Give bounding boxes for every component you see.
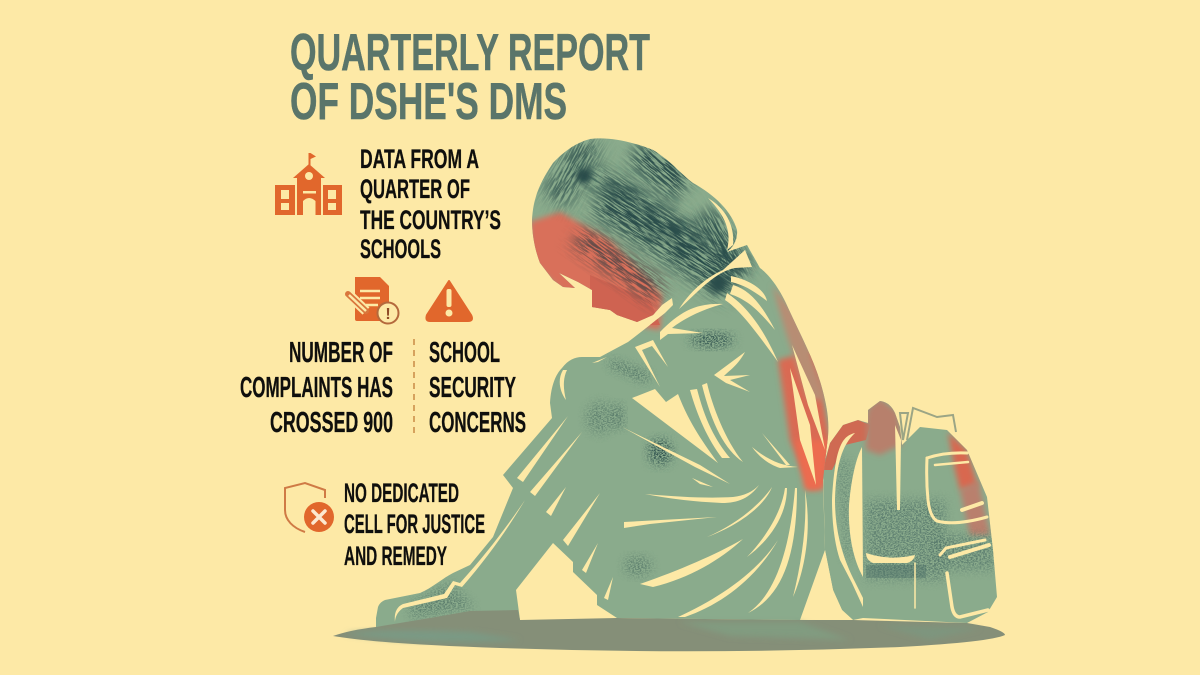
- text block: data coverage: SCHOOLS: [360, 234, 441, 264]
- text block: security concerns: [429, 337, 526, 439]
- leg cuts: [517, 416, 568, 482]
- backpack cuts: [800, 425, 915, 620]
- icon: warning triangle: [426, 281, 472, 321]
- text block: complaints: COMPLAINTS HAS: [240, 372, 393, 404]
- text block: complaints: NUMBER OF: [289, 337, 393, 369]
- text block: data coverage: [360, 144, 501, 264]
- text block: security concerns: SCHOOL: [429, 337, 500, 369]
- title: OF DSHE'S DMS: [290, 73, 567, 131]
- title: [290, 24, 650, 131]
- collar and neck: [679, 250, 752, 309]
- backpack papers: [900, 408, 956, 440]
- ground shadow: [333, 610, 1005, 651]
- red hair and face shading: [530, 212, 668, 330]
- text block: complaints: CROSSED 900: [270, 407, 393, 439]
- title: QUARTERLY REPORT: [290, 24, 650, 82]
- dark grunge on hair: [410, 133, 750, 618]
- text block: no dedicated cell: NO DEDICATED: [344, 478, 459, 508]
- icon: shield with cross: [285, 483, 334, 532]
- red back shading: [772, 285, 830, 490]
- icon: complaint document: !: [385, 306, 391, 323]
- icon: school: [275, 153, 342, 215]
- icon: complaint document: [348, 277, 398, 324]
- text block: security concerns: CONCERNS: [429, 407, 526, 439]
- illustration: backpack: [823, 401, 997, 623]
- text block: no dedicated cell: [344, 478, 485, 571]
- text block: no dedicated cell: AND REMEDY: [344, 541, 447, 571]
- text block: data coverage: THE COUNTRY’S: [360, 205, 501, 235]
- text block: data coverage: QUARTER OF: [360, 174, 470, 204]
- hair highlight: [708, 198, 733, 250]
- back lines: [731, 276, 767, 301]
- torso and skirt cuts: [632, 389, 718, 463]
- garment cream cuts: [395, 250, 825, 622]
- text block: complaints: [240, 337, 393, 439]
- text block: security concerns: SECURITY: [429, 372, 516, 404]
- text block: data coverage: DATA FROM A: [360, 144, 479, 174]
- text block: no dedicated cell: CELL FOR JUSTICE: [344, 509, 485, 539]
- illustration: seated girl silhouette: [376, 133, 830, 627]
